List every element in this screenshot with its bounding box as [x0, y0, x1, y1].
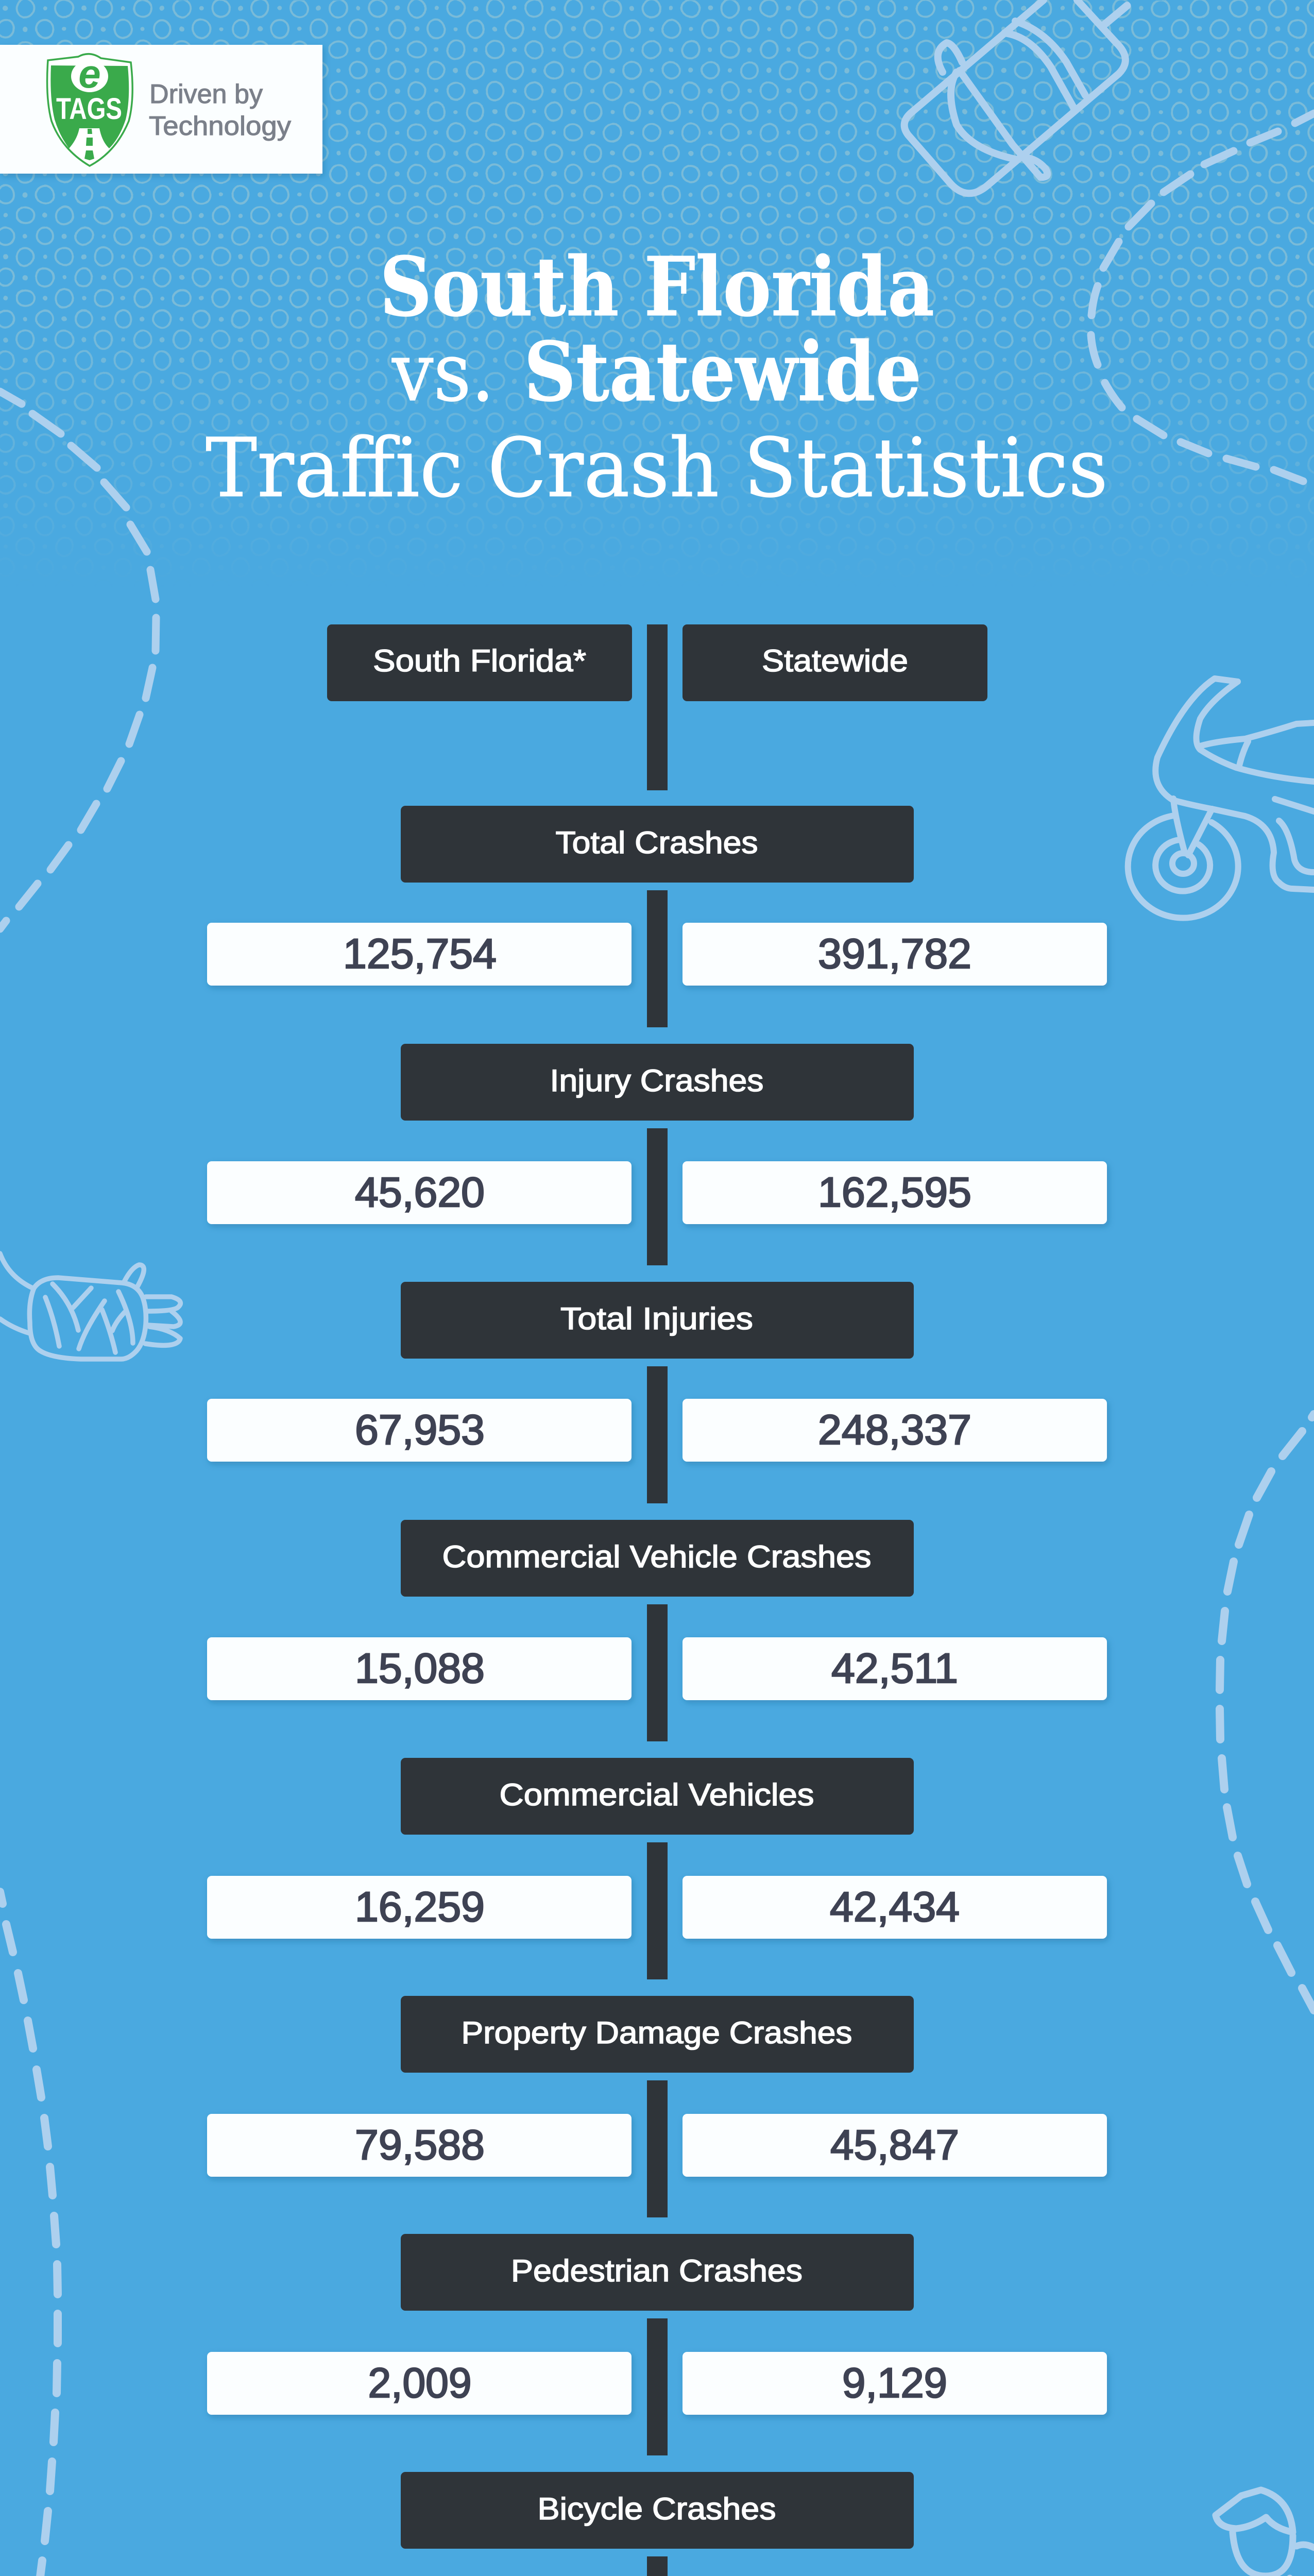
row: Property Damage Crashes: Property Damage Crashes [462, 2015, 852, 2050]
icon: eTags green shield: TAGS [56, 92, 122, 126]
title [206, 240, 1108, 516]
row: Pedestrian Crashes: 2,009 [368, 2360, 472, 2406]
row: Property Damage Crashes: 45,847 [830, 2122, 959, 2168]
row: Injury Crashes: 162,595 [818, 1169, 971, 1216]
row: Commercial Vehicle Crashes: 42,511 [831, 1645, 958, 1692]
title: vs. [391, 325, 494, 420]
logo panel [0, 45, 322, 174]
row: Commercial Vehicle Crashes: 15,088 [355, 1645, 485, 1692]
header: South Florida [327, 624, 632, 701]
row: Injury Crashes: Injury Crashes [550, 1063, 763, 1098]
row: Bicycle Crashes [207, 2472, 1107, 2576]
icon: eTags green shield: e [78, 51, 101, 96]
header: Statewide [682, 624, 987, 701]
title: Statewide [524, 325, 921, 420]
dashed road middle right [1220, 1414, 1314, 2010]
header: South Florida: South Florida* [373, 643, 586, 678]
icon: bandaged roll top right [905, 0, 1125, 193]
logo tagline: Driven by [149, 79, 263, 109]
row: Bicycle Crashes: Bicycle Crashes [538, 2492, 776, 2526]
row: Property Damage Crashes: 79,588 [355, 2122, 485, 2168]
row: Total Injuries: 248,337 [818, 1406, 971, 1453]
row: Commercial Vehicles [207, 1758, 1107, 1979]
row: Injury Crashes: 45,620 [355, 1169, 485, 1216]
row: Pedestrian Crashes: 9,129 [842, 2360, 947, 2406]
icon: arm in a cast [0, 1253, 180, 1359]
dashed road top left [0, 392, 156, 929]
header: Statewide: Statewide [762, 643, 908, 678]
row: Total Crashes: Total Crashes [555, 825, 758, 860]
row: Total Injuries [207, 1282, 1107, 1503]
row: Injury Crashes [207, 1044, 1107, 1265]
dashed road top right [1091, 6, 1314, 481]
row: Property Damage Crashes [207, 1996, 1107, 2217]
row: Commercial Vehicles: 42,434 [830, 1884, 960, 1930]
row: Commercial Vehicles: 16,259 [355, 1884, 485, 1930]
title: Traffic Crash Statistics [206, 421, 1108, 516]
row: Commercial Vehicle Crashes: Commercial Vehicle Crashes [442, 1539, 872, 1574]
row: Total Crashes: 125,754 [343, 930, 497, 977]
row: Pedestrian Crashes: Pedestrian Crashes [511, 2253, 803, 2288]
icon: motorcycle [1128, 679, 1314, 918]
row: Total Crashes [207, 806, 1107, 1027]
logo tagline: Technology [149, 111, 291, 141]
row: Pedestrian Crashes [207, 2234, 1107, 2455]
row: Total Crashes: 391,782 [818, 930, 971, 977]
row: Total Injuries: 67,953 [355, 1406, 485, 1453]
row: Total Injuries: Total Injuries [560, 1301, 753, 1336]
dashed road lower left [0, 1892, 58, 2576]
icon: eTags green shield [47, 51, 132, 166]
column headers [327, 624, 987, 790]
icon: person in wheelchair [1137, 2490, 1314, 2576]
title: South Florida [380, 240, 934, 335]
row: Commercial Vehicle Crashes [207, 1520, 1107, 1741]
row: Commercial Vehicles: Commercial Vehicles [500, 1777, 814, 1812]
logo tagline [149, 79, 291, 141]
